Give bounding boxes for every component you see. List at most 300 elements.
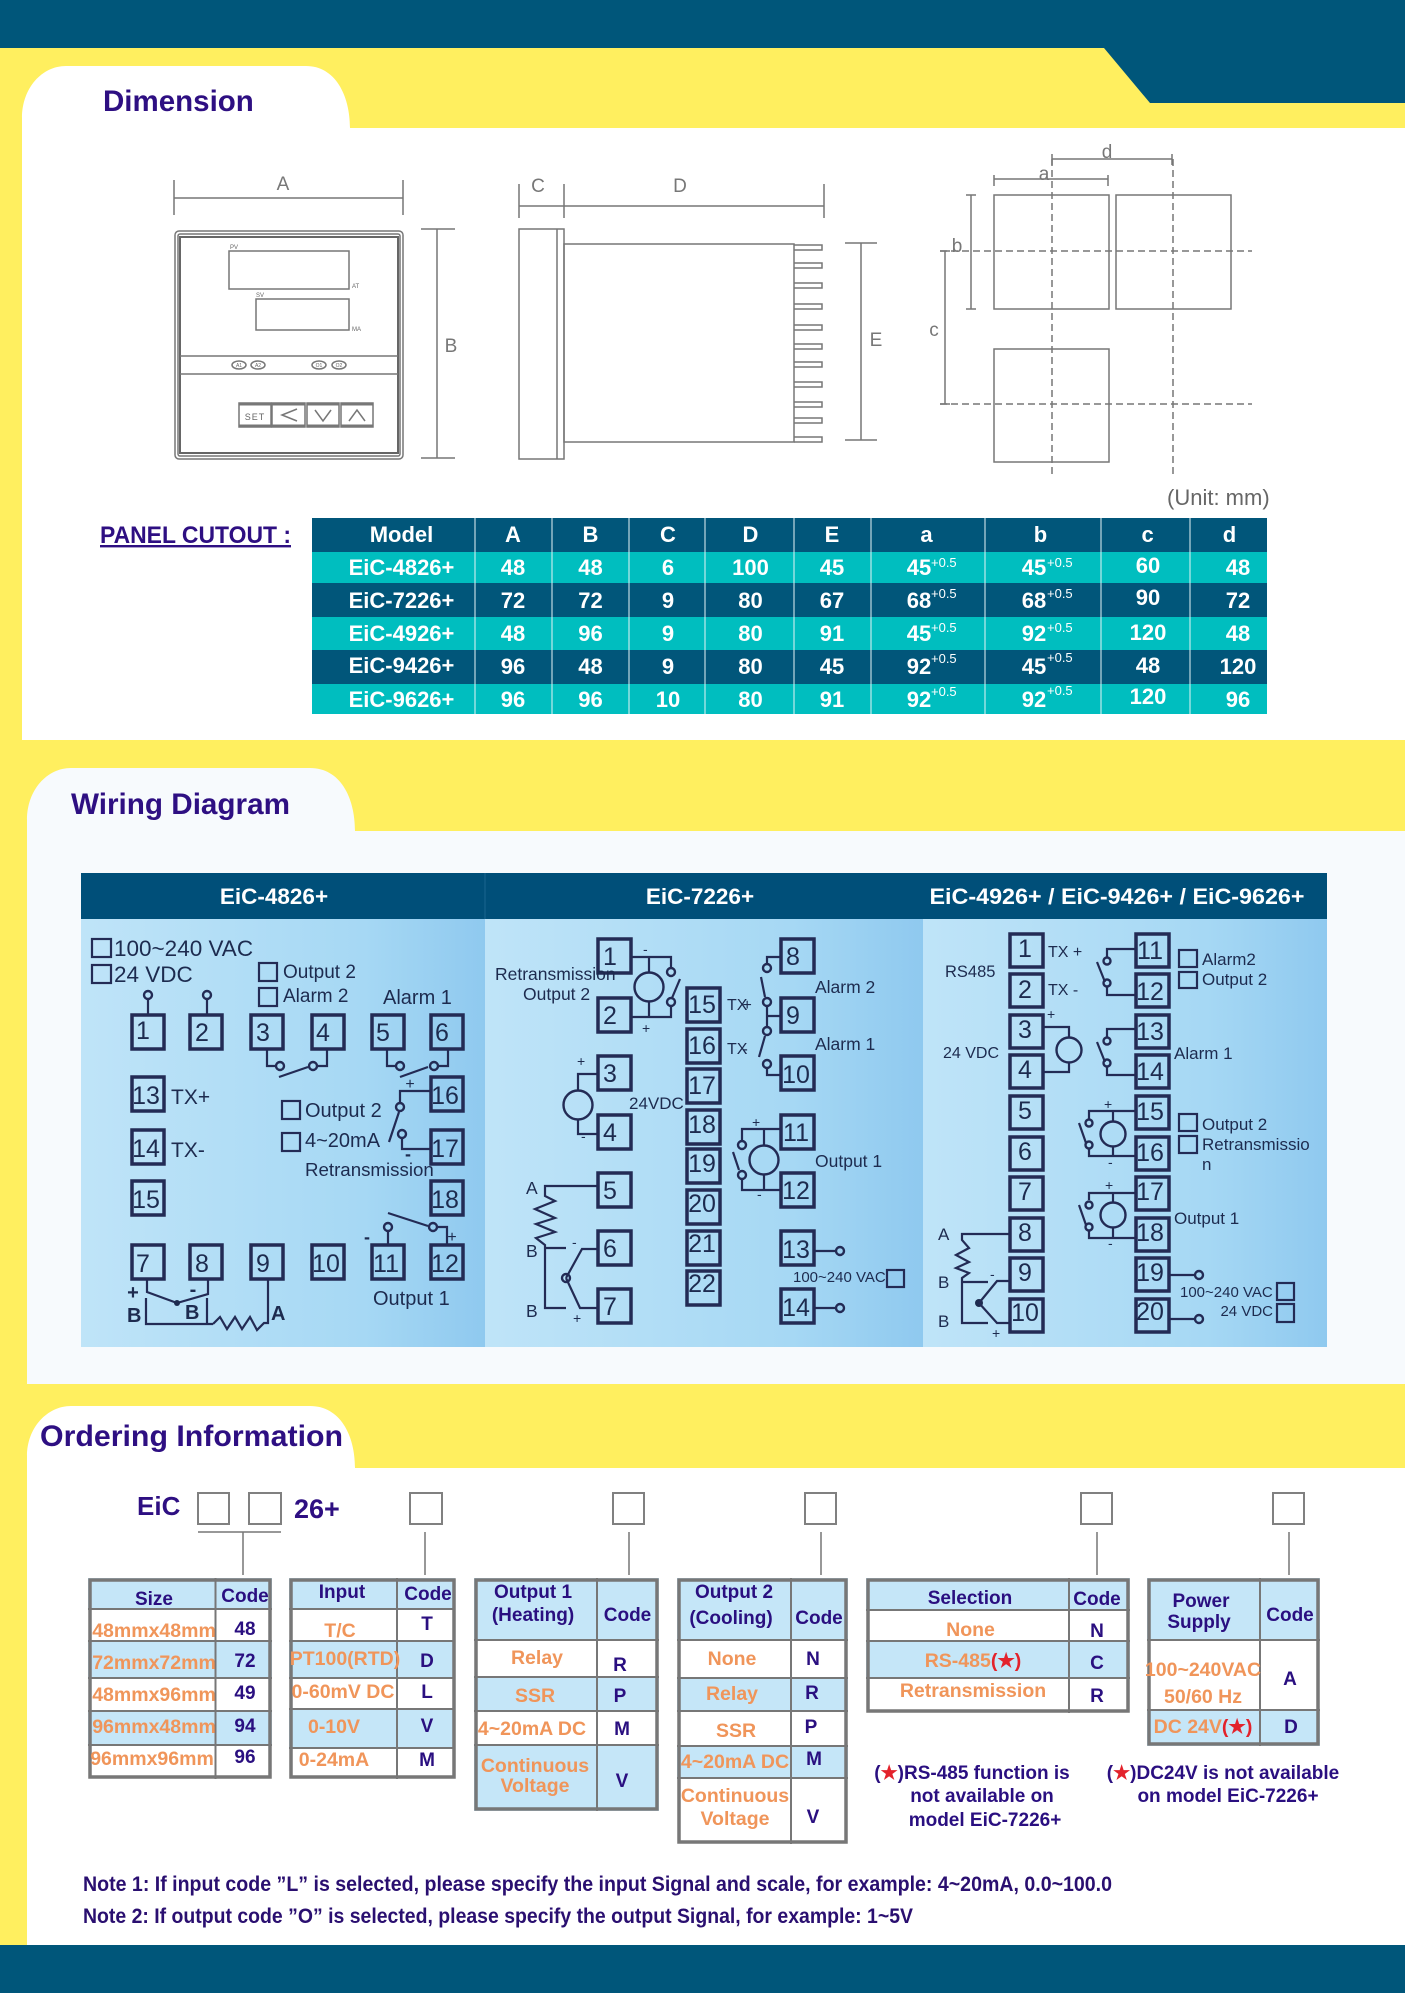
- labels and option boxes: B: [526, 1301, 538, 1321]
- panel: ordering information: [27, 1406, 1405, 1945]
- labels and option boxes: Alarm 1: [1174, 1044, 1233, 1063]
- drawing: front view: B: [445, 336, 457, 357]
- terminals: 1: [1018, 935, 1032, 963]
- table: panel cutout: 45: [820, 555, 844, 580]
- table: input: T: [421, 1614, 433, 1635]
- terminals: 15: [132, 1186, 160, 1214]
- table: selection: RS-485(★): [925, 1650, 1021, 1672]
- table: output 2: P: [805, 1717, 818, 1738]
- table: output 2: N: [806, 1649, 820, 1670]
- labels and option boxes: 100~240 VAC: [793, 1269, 886, 1286]
- table: panel cutout: 80: [738, 654, 763, 679]
- labels and option boxes: 24VDC: [629, 1094, 684, 1113]
- terminals: 14: [132, 1135, 160, 1163]
- table: output 2: Code: [795, 1608, 843, 1629]
- terminals: 2: [1018, 976, 1032, 1004]
- table: panel cutout: 48: [501, 555, 525, 580]
- table: panel cutout: +0.5: [1047, 650, 1073, 665]
- table: panel cutout: 10: [656, 687, 680, 712]
- drawing: panel cutout layout: [929, 142, 1252, 477]
- footnote: DC24V availability: on model EiC-7226+: [1137, 1786, 1319, 1807]
- table: selection: Code: [1073, 1589, 1121, 1610]
- table: size: 72: [234, 1651, 256, 1672]
- terminals: 16: [688, 1032, 716, 1060]
- wiring table header: EiC-4826+: [220, 884, 328, 909]
- panel: dimension: [22, 66, 1405, 740]
- table: panel cutout: 9: [662, 654, 674, 679]
- terminals: 11: [373, 1250, 399, 1278]
- terminals: 12: [1136, 978, 1164, 1006]
- terminals: 19: [1136, 1259, 1164, 1287]
- circuit wiring: [956, 949, 1203, 1323]
- table: panel cutout: +0.5: [1047, 683, 1073, 698]
- table: panel cutout: 60: [1136, 553, 1160, 578]
- table: panel cutout: E: [825, 522, 839, 547]
- table: panel cutout: 48: [578, 555, 603, 580]
- top banner: [0, 0, 1405, 103]
- table: input: [289, 1578, 455, 1779]
- terminals: 2: [195, 1019, 209, 1047]
- panel: wiring diagram: [27, 768, 1405, 1384]
- table: panel cutout: 96: [1226, 687, 1250, 712]
- drawing: side view: D: [673, 176, 687, 197]
- drawing: front view: O2: [336, 363, 343, 369]
- labels and option boxes: Output 1: [1174, 1209, 1239, 1228]
- terminals: 6: [1018, 1138, 1032, 1166]
- drawing: side view: C: [531, 176, 545, 197]
- table: panel cutout: 9: [662, 588, 674, 613]
- terminals: 6: [603, 1235, 617, 1263]
- drawing: front view: A2: [255, 363, 261, 369]
- table: output 1: M: [614, 1719, 630, 1740]
- terminals: 8: [195, 1250, 209, 1278]
- drawing: front view: SV: [256, 293, 264, 299]
- labels and option boxes: +: [1047, 1006, 1055, 1022]
- labels and option boxes: -: [990, 1266, 995, 1282]
- table: selection: [866, 1578, 1130, 1713]
- terminals: 12: [431, 1250, 459, 1278]
- table: size: 48: [234, 1619, 256, 1640]
- terminals: 1: [136, 1017, 150, 1045]
- table: panel cutout: 100: [732, 555, 769, 580]
- table: output 2: Continuous: [681, 1785, 789, 1807]
- table: output 1: Continuous: [481, 1755, 589, 1777]
- labels and option boxes: -: [190, 1279, 196, 1301]
- terminals: 4: [603, 1119, 617, 1147]
- labels and option boxes: TX-: [171, 1139, 205, 1162]
- heading: ordering information: Ordering Information: [40, 1420, 343, 1453]
- terminals: 8: [786, 943, 800, 971]
- table: size: 48mmx48mm: [92, 1620, 216, 1642]
- table: output 2: Output 2: [695, 1582, 773, 1603]
- table: output 1: 4~20mA DC: [478, 1718, 586, 1740]
- table: panel cutout: EiC-4926+: [349, 621, 454, 646]
- model code selector: [137, 1491, 1304, 1575]
- table: panel cutout: 48: [501, 621, 525, 646]
- terminals: 13: [132, 1082, 160, 1110]
- table: panel cutout: [312, 518, 1267, 714]
- table: panel cutout: C: [660, 522, 676, 547]
- heading: wiring diagram: Wiring Diagram: [71, 788, 290, 821]
- table: size: 94: [234, 1716, 256, 1737]
- table: power supply: Power: [1172, 1591, 1230, 1612]
- labels and option boxes: -: [1108, 1235, 1113, 1251]
- table: input: PT100(RTD): [290, 1648, 400, 1670]
- terminals: 13: [1136, 1018, 1164, 1046]
- labels and option boxes: Alarm 2: [815, 977, 875, 997]
- terminals: 14: [782, 1294, 810, 1322]
- labels and option boxes: +: [577, 1053, 585, 1069]
- terminals: 1: [603, 943, 617, 971]
- table: panel cutout: EiC-9626+: [349, 687, 454, 712]
- labels and option boxes: B: [127, 1305, 141, 1327]
- labels and option boxes: B: [938, 1312, 949, 1331]
- labels and option boxes: 24 VDC: [943, 1045, 999, 1062]
- table: panel cutout: +0.5: [931, 620, 957, 635]
- bottom banner: [0, 1945, 1405, 1993]
- terminals: 16: [1136, 1139, 1164, 1167]
- table: size: Size: [135, 1589, 173, 1610]
- table: panel cutout: 67: [820, 588, 844, 613]
- footnote: RS-485 availability: (★)RS-485 function is: [874, 1763, 1070, 1784]
- labels and option boxes: 24 VDC: [1220, 1303, 1273, 1320]
- labels and option boxes: Output 2: [305, 1100, 382, 1122]
- labels and option boxes: -: [581, 1128, 586, 1144]
- terminals: 4: [316, 1019, 330, 1047]
- labels and option boxes: 24 VDC: [114, 962, 193, 987]
- table: input: M: [419, 1750, 435, 1771]
- table: panel cutout: +0.5: [931, 586, 957, 601]
- labels and option boxes: -: [757, 1186, 762, 1202]
- labels and option boxes: B: [185, 1302, 199, 1324]
- table: power supply: 100~240VAC: [1145, 1659, 1261, 1681]
- table: power supply: 50/60 Hz: [1164, 1686, 1242, 1708]
- labels and option boxes: Retransmissio: [1202, 1135, 1310, 1154]
- table: panel cutout: EiC-7226+: [349, 588, 454, 613]
- table: selection: Selection: [928, 1588, 1012, 1609]
- terminals: 8: [1018, 1219, 1032, 1247]
- labels and option boxes: Alarm 1: [383, 987, 452, 1009]
- labels and option boxes: Output 2: [283, 962, 356, 983]
- table: panel cutout: 72: [578, 588, 603, 613]
- labels and option boxes: -: [572, 1234, 577, 1250]
- table: output 2: 4~20mA DC: [681, 1751, 789, 1773]
- table: panel cutout: d: [1223, 522, 1236, 547]
- drawing: front view: PV: [230, 245, 238, 251]
- terminals: [598, 939, 814, 1323]
- table: panel cutout: +0.5: [931, 651, 957, 666]
- table: selection: C: [1090, 1653, 1104, 1674]
- wiring diagram: EiC-4926+ / 9426+ / 9626+: [923, 919, 1327, 1347]
- table: panel cutout: 72: [1226, 588, 1250, 613]
- drawing: front view: MA: [352, 327, 361, 333]
- table: panel cutout: b: [1034, 522, 1047, 547]
- table: panel cutout: 48: [1226, 621, 1250, 646]
- labels and option boxes: TX +: [1048, 944, 1082, 961]
- drawing: front view: AT: [352, 284, 360, 290]
- table: panel cutout: 96: [578, 621, 603, 646]
- table: selection: N: [1090, 1621, 1104, 1642]
- table: power supply: Code: [1266, 1605, 1314, 1626]
- note 1: Note 1: If input code ”L” is selected, please specify the input Signal and scale, for example: 4~20mA, 0.0~100.0: [83, 1873, 1112, 1896]
- table: panel cutout: 80: [738, 588, 763, 613]
- table: panel cutout: B: [583, 522, 598, 547]
- circuit wiring: [144, 991, 448, 1330]
- terminals: [132, 1015, 463, 1279]
- table: selection: R: [1090, 1686, 1104, 1707]
- wiring table header: EiC-7226+: [646, 884, 754, 909]
- table: panel cutout: EiC-4826+: [349, 555, 454, 580]
- terminals: 13: [782, 1236, 810, 1264]
- table: panel cutout: a: [920, 522, 933, 547]
- terminals: 17: [431, 1135, 459, 1163]
- labels and option boxes: 100~240 VAC: [114, 936, 253, 961]
- labels and option boxes: A: [938, 1225, 950, 1244]
- terminals: 5: [603, 1177, 617, 1205]
- terminals: 17: [688, 1072, 716, 1100]
- table: panel cutout: 45: [820, 654, 844, 679]
- labels and option boxes: +: [992, 1325, 1000, 1341]
- terminals: 20: [1136, 1298, 1164, 1326]
- terminals: 20: [688, 1190, 716, 1218]
- table: panel cutout: 45: [907, 555, 931, 580]
- terminals: 14: [1136, 1058, 1164, 1086]
- table: panel cutout: 120: [1220, 654, 1256, 679]
- heading: panel cutout: PANEL CUTOUT :: [100, 522, 291, 549]
- table: output 2: (Cooling): [689, 1608, 773, 1629]
- terminals: 16: [431, 1082, 459, 1110]
- table: panel cutout: 96: [578, 687, 603, 712]
- labels and option boxes: +: [1104, 1096, 1112, 1112]
- labels and option boxes: +: [405, 1076, 415, 1093]
- table: output 2: None: [708, 1648, 757, 1670]
- labels and option boxes: B: [526, 1241, 538, 1261]
- terminals: 2: [603, 1002, 617, 1030]
- table: panel cutout: +0.5: [931, 684, 957, 699]
- table: panel cutout: EiC-9426+: [349, 653, 454, 678]
- table: panel cutout: 45: [1022, 555, 1046, 580]
- note 2: Note 2: If output code ”O” is selected, please specify the output Signal, for example: 1~5V: [83, 1905, 913, 1928]
- terminals: 7: [1018, 1178, 1032, 1206]
- table: panel cutout: +0.5: [1047, 586, 1073, 601]
- labels and option boxes: Alarm 1: [815, 1034, 875, 1054]
- table: input: 0-10V: [308, 1716, 360, 1738]
- labels and option boxes: +: [447, 1229, 457, 1246]
- labels and option boxes: Output 2: [1202, 1115, 1267, 1134]
- table: size: Code: [221, 1586, 269, 1607]
- table: size: 96: [234, 1747, 256, 1768]
- labels and option boxes: [495, 941, 904, 1326]
- table: panel cutout: 92: [1022, 687, 1046, 712]
- table: size: 96mmx96mm: [90, 1748, 214, 1770]
- labels and option boxes: Retransmission: [495, 964, 616, 984]
- terminals: 3: [1018, 1016, 1032, 1044]
- drawing: panel cutout layout: d: [1102, 142, 1112, 163]
- table: panel cutout: 48: [1136, 653, 1160, 678]
- table: output 1: Voltage: [501, 1775, 570, 1797]
- table: power supply: A: [1283, 1669, 1297, 1690]
- model code selector: EiC: [137, 1491, 181, 1521]
- table: output 1: P: [614, 1686, 627, 1707]
- table: power supply: DC 24V(★): [1154, 1716, 1252, 1738]
- table: output 2: SSR: [716, 1720, 756, 1742]
- table: input: 0-24mA: [299, 1749, 369, 1771]
- table: selection: None: [946, 1619, 995, 1641]
- drawing: side view: E: [870, 330, 882, 351]
- labels and option boxes: A: [526, 1178, 538, 1198]
- terminals: 15: [688, 991, 716, 1019]
- drawing: side view: [519, 176, 882, 459]
- table: panel cutout: 45: [907, 621, 931, 646]
- table: panel cutout: 6: [662, 555, 674, 580]
- terminals: 3: [603, 1060, 617, 1088]
- terminals: 11: [783, 1119, 809, 1147]
- labels and option boxes: Output 1: [373, 1288, 450, 1310]
- terminals: 12: [782, 1177, 810, 1205]
- labels and option boxes: Output 2: [523, 984, 590, 1004]
- table: panel cutout: +0.5: [1047, 555, 1073, 570]
- terminals: 15: [1136, 1098, 1164, 1126]
- terminals: 5: [1018, 1097, 1032, 1125]
- table: selection: Retransmission: [900, 1680, 1046, 1702]
- table: panel cutout: 96: [501, 687, 525, 712]
- terminals: 18: [431, 1186, 459, 1214]
- labels and option boxes: Output 2: [1202, 970, 1267, 989]
- table: panel cutout: 80: [738, 621, 763, 646]
- table: size: 72mmx72mm: [92, 1652, 216, 1674]
- table: size: 96mmx48mm: [92, 1716, 216, 1738]
- table: output 2: Relay: [706, 1683, 758, 1705]
- labels and option boxes: +: [1105, 1177, 1113, 1193]
- table: size: 49: [234, 1683, 256, 1704]
- labels and option boxes: Retransmission: [305, 1159, 434, 1180]
- labels and option boxes: 100~240 VAC: [1180, 1284, 1273, 1301]
- labels and option boxes: B: [938, 1273, 949, 1292]
- labels and option boxes: RS485: [945, 963, 995, 981]
- labels and option boxes: +: [573, 1310, 581, 1326]
- terminals: 9: [1018, 1259, 1032, 1287]
- table: output 1: Output 1: [494, 1582, 572, 1603]
- drawing: panel cutout layout: b: [952, 236, 962, 257]
- labels and option boxes: TX -: [1048, 982, 1078, 999]
- unit note: (Unit: mm): [1167, 485, 1270, 510]
- table: output 2: R: [805, 1683, 819, 1704]
- table: panel cutout: 68: [1022, 588, 1046, 613]
- table: output 1: R: [613, 1655, 627, 1676]
- table: input: D: [420, 1651, 434, 1672]
- labels and option boxes: -: [1048, 1063, 1053, 1079]
- labels and option boxes: -: [405, 1144, 411, 1164]
- labels and option boxes: [938, 944, 1310, 1341]
- table: panel cutout: 91: [820, 687, 844, 712]
- wiring diagram: EiC-7226+: [485, 919, 923, 1347]
- table: input: T/C: [324, 1620, 356, 1642]
- table: output 2: M: [806, 1749, 822, 1770]
- drawing: front view: A: [277, 174, 290, 195]
- table: panel cutout: 92: [907, 687, 931, 712]
- terminals: 10: [782, 1061, 810, 1089]
- drawing: front view: [174, 174, 457, 459]
- table: panel cutout: Model: [370, 522, 433, 547]
- table: output 1: (Heating): [492, 1605, 574, 1626]
- terminals: 11: [1137, 937, 1163, 965]
- labels and option boxes: TX+: [171, 1086, 210, 1109]
- table: panel cutout: +0.5: [1047, 620, 1073, 635]
- table: input: Input: [319, 1582, 366, 1603]
- terminals: 22: [688, 1270, 716, 1298]
- labels and option boxes: TX-: [727, 1041, 748, 1058]
- terminals: 9: [256, 1250, 270, 1278]
- labels and option boxes: Alarm2: [1202, 950, 1256, 969]
- table: panel cutout: +0.5: [931, 555, 957, 570]
- table: input: Code: [404, 1584, 452, 1605]
- terminals: 10: [312, 1250, 340, 1278]
- table: output 1: Code: [604, 1605, 651, 1626]
- terminals: [1010, 934, 1169, 1332]
- wiring diagram: EiC-4826+: [81, 919, 485, 1347]
- table: panel cutout: 68: [907, 588, 931, 613]
- terminals: 7: [136, 1250, 150, 1278]
- table: output 2: [677, 1578, 848, 1844]
- table: output 1: Relay: [511, 1647, 563, 1669]
- wiring table header: [81, 873, 1327, 919]
- table: panel cutout: 48: [578, 654, 603, 679]
- labels and option boxes: 4~20mA: [305, 1130, 381, 1152]
- labels and option boxes: -: [643, 941, 648, 957]
- model code selector: 26+: [294, 1494, 340, 1524]
- drawing: panel cutout layout: c: [929, 320, 939, 341]
- terminals: 10: [1011, 1299, 1039, 1327]
- table: panel cutout: 90: [1136, 585, 1160, 610]
- table: power supply: D: [1284, 1717, 1298, 1738]
- terminals: 21: [688, 1230, 716, 1258]
- table: power supply: [1145, 1578, 1320, 1746]
- circuit wiring: [535, 957, 844, 1312]
- labels and option boxes: -: [364, 1227, 370, 1247]
- table: power supply: Supply: [1167, 1612, 1231, 1633]
- labels and option boxes: TX+: [727, 997, 752, 1014]
- table: panel cutout: 120: [1130, 620, 1166, 645]
- heading: dimension: Dimension: [103, 85, 254, 118]
- drawing: panel cutout layout: a: [1039, 164, 1050, 185]
- terminals: 5: [376, 1019, 390, 1047]
- terminals: 9: [786, 1002, 800, 1030]
- table: panel cutout: 91: [820, 621, 844, 646]
- table: output 1: [474, 1578, 659, 1811]
- labels and option boxes: -: [1108, 1154, 1113, 1170]
- table: size: [88, 1578, 272, 1779]
- drawing: front view: O1: [316, 363, 323, 369]
- drawing: front view: A1: [236, 363, 242, 369]
- terminals: 4: [1018, 1056, 1032, 1084]
- table: panel cutout: 9: [662, 621, 674, 646]
- labels and option boxes: Alarm 2: [283, 986, 348, 1007]
- labels and option boxes: A: [271, 1303, 285, 1325]
- terminals: 19: [688, 1150, 716, 1178]
- table: panel cutout: c: [1141, 522, 1154, 547]
- labels and option boxes: n: [1202, 1155, 1211, 1174]
- terminals: 17: [1136, 1178, 1164, 1206]
- table: panel cutout: 92: [1022, 621, 1046, 646]
- table: panel cutout: D: [743, 522, 758, 547]
- terminals: 6: [435, 1019, 449, 1047]
- footnote: RS-485 availability: not available on: [910, 1786, 1054, 1807]
- terminals: 7: [603, 1293, 617, 1321]
- labels and option boxes: +: [127, 1282, 139, 1304]
- table: input: 0-60mV DC: [292, 1681, 394, 1703]
- terminals: 18: [1136, 1219, 1164, 1247]
- drawing: front view: SET: [245, 412, 265, 422]
